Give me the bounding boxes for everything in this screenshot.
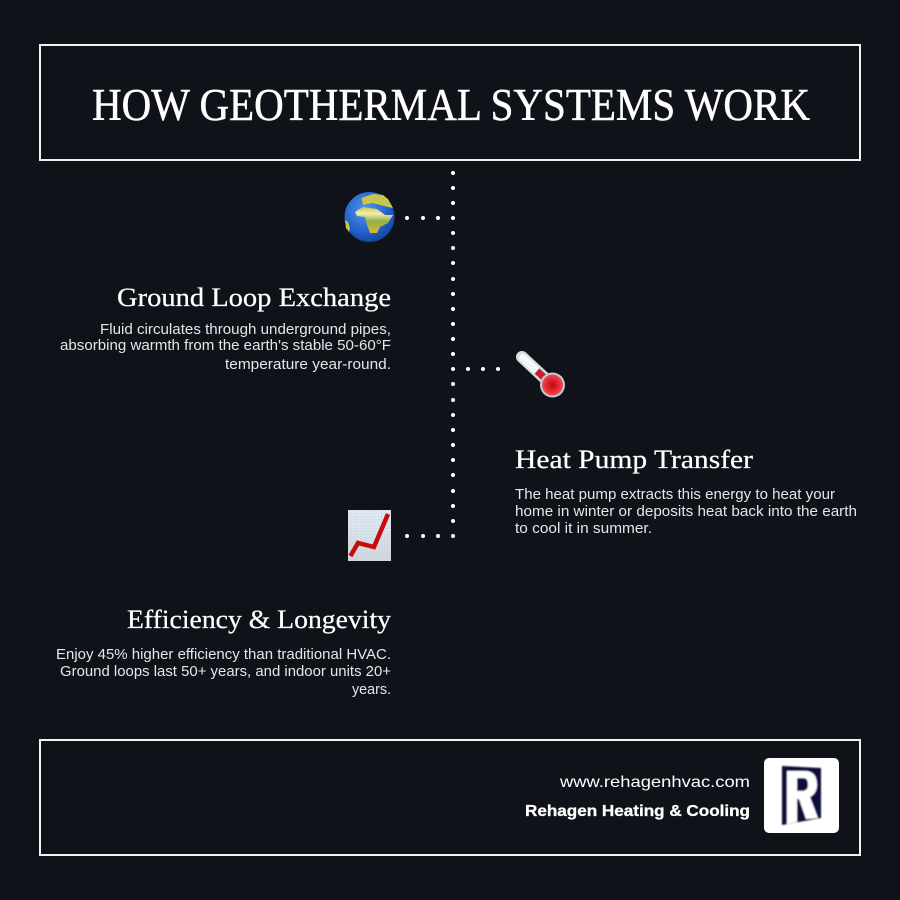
icon: thermometer (522, 357, 565, 398)
icon: chart increasing (348, 510, 391, 561)
timeline: dotted connectors (405, 171, 500, 538)
description: Fluid circulates through underground pipes, (100, 322, 391, 338)
website: www.rehagenhvac.com (559, 774, 750, 791)
heading: Efficiency & Longevity (127, 605, 391, 634)
icon: globe (344, 192, 394, 242)
logo (764, 758, 839, 833)
description: temperature year-round. (225, 357, 391, 373)
description: home in winter or deposits heat back into the earth (515, 504, 857, 520)
description: to cool it in summer. (515, 521, 652, 537)
description (60, 322, 391, 373)
description: Ground loops last 50+ years, and indoor units 20+ (60, 664, 391, 680)
heading: Ground Loop Exchange (117, 283, 391, 312)
description (515, 487, 857, 537)
footer panel (40, 740, 860, 855)
step: Efficiency & Longevity (56, 605, 391, 698)
description (56, 647, 391, 698)
description: years. (352, 682, 391, 698)
title: HOW GEOTHERMAL SYSTEMS WORK (92, 80, 810, 130)
heading: Heat Pump Transfer (515, 445, 753, 474)
step: Heat Pump Transfer (515, 445, 857, 537)
title panel (40, 45, 860, 160)
description: absorbing warmth from the earth's stable 50-60°F (60, 338, 391, 354)
description: Enjoy 45% higher efficiency than traditional HVAC. (56, 647, 391, 663)
description: The heat pump extracts this energy to heat your (515, 487, 835, 503)
company name: Rehagen Heating & Cooling (525, 803, 750, 820)
step: Ground Loop Exchange (60, 283, 391, 373)
